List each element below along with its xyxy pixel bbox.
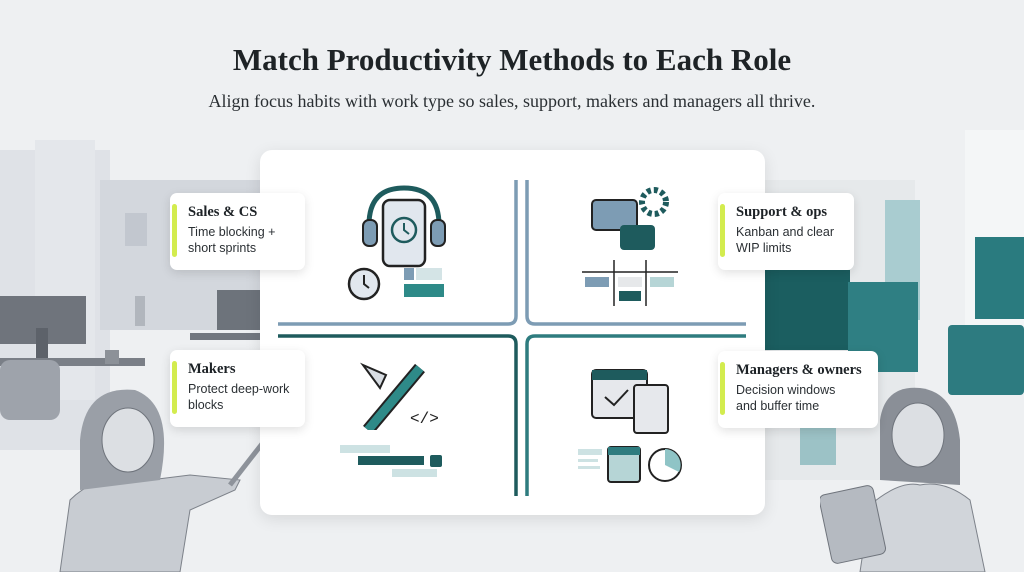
callout: Makers: Protect deep-work xyxy=(188,382,289,396)
callout: Sales & CS: Time blocking + xyxy=(188,225,275,239)
icon: headphones phone xyxy=(362,186,446,268)
icon: clock xyxy=(348,268,380,300)
callout: Managers & owners: and buffer time xyxy=(736,399,819,413)
illustration: woman with tablet xyxy=(820,388,986,572)
title: Match Productivity Methods to Each Role xyxy=(233,42,791,77)
subtitle: Align focus habits with work type so sales, support, makers and managers all thrive. xyxy=(209,91,815,111)
icon: time blocks xyxy=(404,268,444,297)
callout: Sales & CS xyxy=(170,193,305,270)
callout: Support & ops xyxy=(718,193,854,270)
callout: Managers & owners xyxy=(718,351,878,428)
illustration: woman with stylus xyxy=(60,390,260,572)
icon: calendar checklist xyxy=(591,369,669,434)
callout: Makers: blocks xyxy=(188,398,223,412)
callout: Support & ops: Support & ops xyxy=(736,204,827,220)
icon: pen and pencil xyxy=(360,362,439,430)
panel: quadrant card xyxy=(260,150,765,515)
callout: Makers: Makers xyxy=(188,361,236,377)
icon: kanban board xyxy=(582,260,678,306)
icon: window and clock xyxy=(578,446,682,483)
callout: Support & ops: Kanban and clear xyxy=(736,225,834,239)
icon: pen and pencil: </> xyxy=(410,410,439,428)
callout: Support & ops: WIP limits xyxy=(736,241,791,255)
icon: chat gear xyxy=(591,187,669,250)
callout: Sales & CS: short sprints xyxy=(188,241,256,255)
callout: Managers & owners: Decision windows xyxy=(736,383,835,397)
icon: locked gantt xyxy=(340,445,442,477)
dividers xyxy=(278,180,746,496)
callout: Makers xyxy=(170,350,305,427)
callout: Sales & CS: Sales & CS xyxy=(188,204,257,220)
callout: Managers & owners: Managers & owners xyxy=(736,362,862,378)
